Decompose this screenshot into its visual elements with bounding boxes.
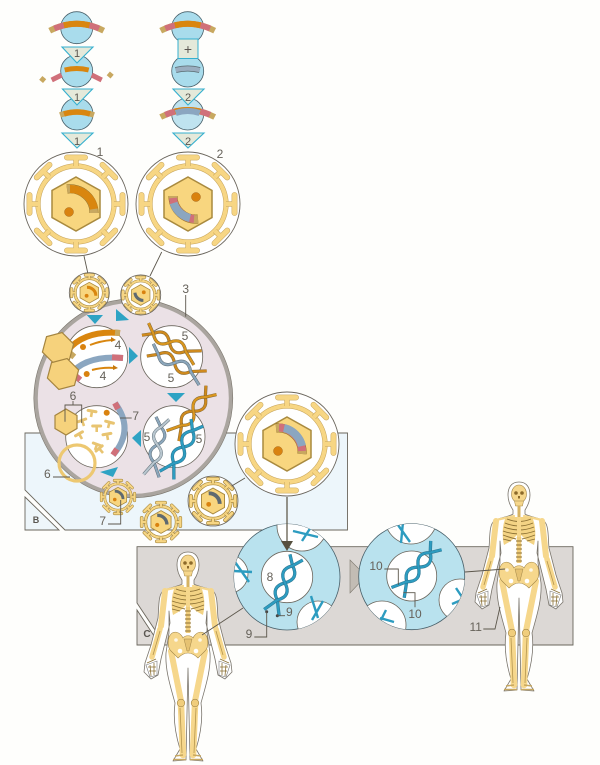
released virus 1 bbox=[101, 480, 135, 514]
released virus 2 bbox=[142, 503, 180, 541]
label 6 bracket: 6 bbox=[70, 389, 77, 403]
left human skeleton bbox=[144, 552, 232, 761]
leader to right skeleton bbox=[465, 569, 505, 572]
step triangle 1: 1 bbox=[74, 136, 80, 148]
panel C letter: C bbox=[143, 629, 151, 640]
label 3 with leader: 3 bbox=[182, 282, 189, 296]
white circle: assembly of proteins bbox=[66, 403, 128, 468]
label 11: 11 bbox=[469, 620, 482, 634]
panel C: host tissue background bbox=[137, 547, 573, 645]
leader to large virus bbox=[232, 478, 245, 486]
label 6 ring: 6 bbox=[44, 467, 51, 481]
label 9 inner: 9 bbox=[286, 605, 293, 619]
label 5: 5 bbox=[144, 430, 151, 444]
released virus 3 bbox=[188, 476, 238, 526]
label 3 with leader bbox=[182, 282, 189, 317]
label 6 bracket bbox=[65, 389, 82, 423]
arrow from virus to cell bbox=[281, 497, 293, 551]
step triangle 2: 2 bbox=[185, 136, 191, 148]
white circle: gene transcription bbox=[66, 326, 128, 388]
label 10 lower bbox=[403, 593, 422, 621]
cell with cut gene bbox=[39, 55, 114, 87]
label 5: 5 bbox=[168, 371, 175, 385]
step triangle 1: 1 bbox=[74, 92, 80, 104]
leader to left skeleton bbox=[202, 608, 243, 635]
label 7 with leader: 7 bbox=[99, 514, 106, 528]
right human skeleton bbox=[475, 482, 563, 691]
cell with complete gene bbox=[50, 12, 104, 44]
blue cell with integrating gene bbox=[234, 524, 340, 630]
cell with recombined gene bbox=[161, 98, 215, 130]
label 10 lower: 10 bbox=[408, 607, 422, 621]
label 9 outer: 9 bbox=[246, 627, 253, 641]
column 1: bacterial cells and steps bbox=[39, 12, 114, 148]
label 7 gene bbox=[120, 409, 139, 423]
label 7 with leader bbox=[99, 500, 121, 528]
label 5: 5 bbox=[182, 329, 189, 343]
virus 1 bbox=[24, 152, 128, 256]
white circle: gene replication bbox=[141, 322, 207, 388]
nucleus with helix bbox=[387, 551, 437, 601]
neighbouring white areas bbox=[234, 524, 332, 629]
label 9 inner bbox=[277, 605, 293, 619]
label 4 upper: 4 bbox=[115, 338, 122, 352]
small virus entering 2 bbox=[121, 275, 161, 315]
neighbouring white areas bbox=[368, 524, 465, 630]
blue cell after expression bbox=[358, 523, 466, 630]
grey transition triangle bbox=[350, 560, 366, 593]
step triangle 2: 2 bbox=[185, 92, 191, 104]
white circle: recombined genes bbox=[143, 385, 217, 479]
flow triangles bbox=[87, 309, 185, 477]
small virus entering 1 bbox=[69, 273, 109, 313]
label 2: 2 bbox=[217, 147, 224, 161]
cell with grey fragment bbox=[172, 55, 204, 87]
column 2: bacterial cells and steps bbox=[161, 12, 215, 148]
label 6 ring bbox=[44, 467, 70, 481]
cell with complete gene bbox=[161, 12, 215, 44]
shell ring bbox=[59, 445, 95, 481]
leader lines from viruses to small viruses bbox=[84, 252, 162, 276]
infected host cell bbox=[34, 299, 233, 498]
label 10 upper: 10 bbox=[369, 559, 383, 573]
label 7 gene: 7 bbox=[132, 409, 139, 423]
label 1: 1 bbox=[97, 145, 104, 159]
empty capsid hexagon bbox=[55, 409, 77, 435]
cell with shortened gene bbox=[60, 98, 94, 130]
panel B letter: B bbox=[33, 515, 40, 525]
label 10 upper bbox=[369, 559, 398, 585]
virus 2 bbox=[136, 152, 240, 256]
label 9 outer bbox=[246, 612, 267, 641]
label 11 bbox=[469, 607, 500, 634]
nucleus with helix bbox=[261, 551, 313, 603]
label 5: 5 bbox=[196, 432, 203, 446]
hexagon capsids entering bbox=[40, 329, 81, 393]
plus connector: + bbox=[184, 41, 192, 57]
step triangle 1: 1 bbox=[74, 48, 80, 60]
panel B: host tissue background bbox=[25, 433, 348, 530]
large recombined virus bbox=[235, 392, 339, 496]
label 8: 8 bbox=[267, 570, 274, 584]
label 4 lower: 4 bbox=[100, 369, 107, 383]
